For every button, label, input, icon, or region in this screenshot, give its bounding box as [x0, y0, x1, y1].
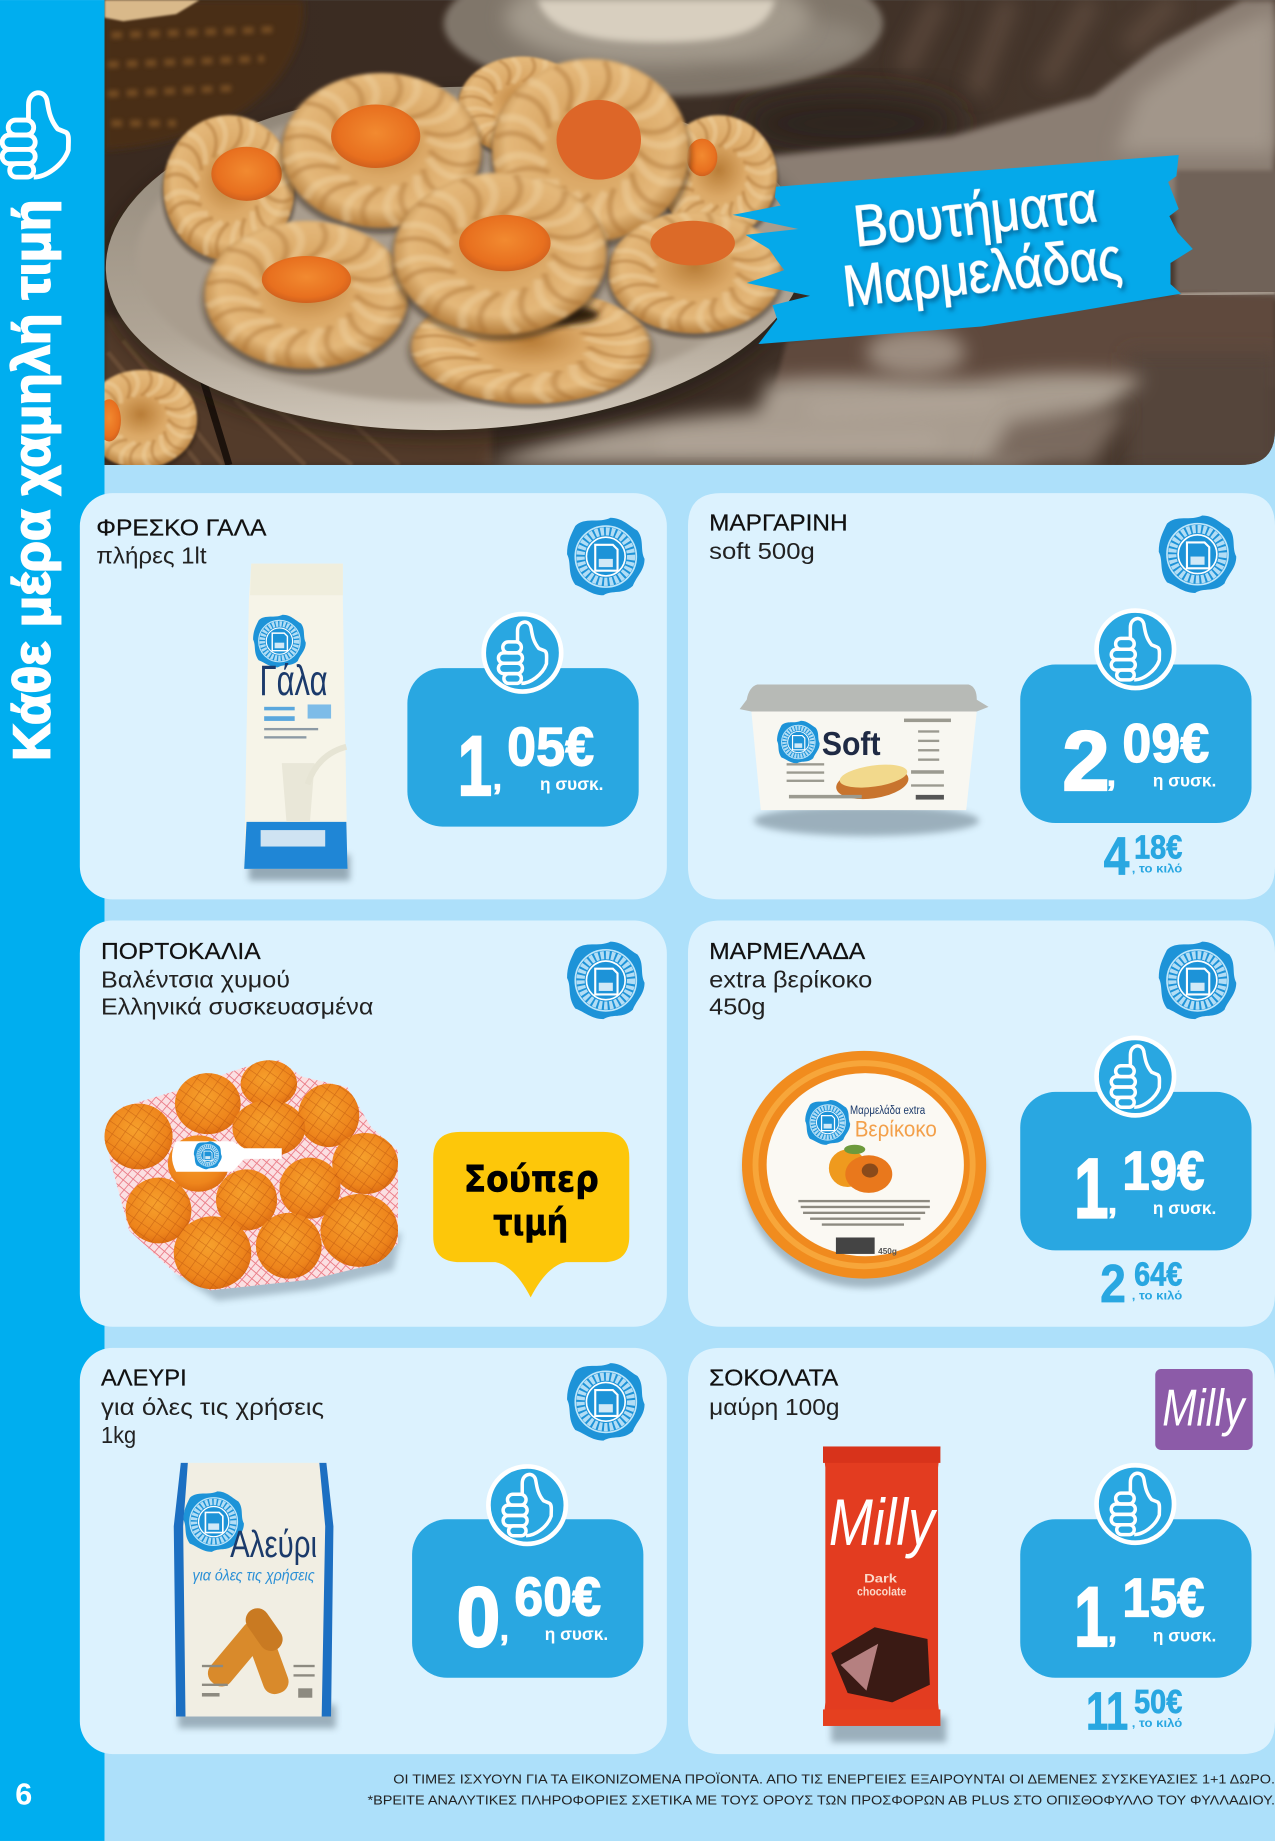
logo word: Milly [1162, 1378, 1247, 1436]
price box [407, 614, 639, 827]
bar flavour 1: Dark [864, 1573, 898, 1586]
panel background [688, 1348, 1275, 1754]
saucer [444, 0, 883, 96]
icon: thumbs badge [1097, 1465, 1174, 1543]
price box [412, 1466, 643, 1678]
callout line 2: τιμή [493, 1201, 568, 1244]
unit: η συσκ. [540, 774, 603, 794]
bowl highlights [108, 29, 276, 123]
jam [211, 147, 282, 201]
brand word: Soft [822, 725, 881, 762]
footer note line 2: *ΒΡΕΙΤΕ ΑΝΑΛΥΤΙΚΕΣ ΠΛΗΡΟΦΟΡΙΕΣ ΣΧΕΤΙΚΑ ΜΕ ΤΟΥΣ ΟΡΟΥΣ ΤΩΝ ΠΡΟΣΦΟΡΩΝ ΑΒ PLUS ΣΤΟ ΟΠΙΣΘΟΦΥΛΛΟ ΤΟΥ ΦΥΛΛΑΔΙΟΥ. [367, 1793, 1275, 1808]
product: milk carton [244, 564, 350, 881]
carton seal [253, 615, 306, 667]
barcode [836, 1237, 875, 1254]
comma: , [1107, 758, 1116, 792]
carton word: Γάλα [259, 657, 328, 704]
label [767, 1073, 964, 1256]
subheading: μαύρη 100g [709, 1394, 839, 1420]
nutrition [261, 830, 325, 847]
wrapper [823, 1446, 940, 1726]
cookie top-left [276, 70, 486, 236]
per kilo: , το κιλό [1132, 1290, 1182, 1303]
jam [687, 139, 717, 176]
bag fine print [202, 1665, 315, 1698]
tub body [751, 712, 977, 810]
panel: chocolate [688, 1348, 1275, 1754]
carton base [244, 822, 348, 869]
box [1020, 665, 1252, 823]
wrapper top [823, 1446, 940, 1463]
price euros: 1 [1074, 1141, 1108, 1236]
comma: , [1108, 1186, 1117, 1220]
pastry [203, 1604, 292, 1697]
shadow [831, 1716, 946, 1742]
panel: milk [80, 493, 667, 899]
cloth light line [1180, 292, 1275, 295]
cookie bottom [393, 280, 668, 413]
panel: oranges [80, 920, 667, 1327]
jam [556, 100, 641, 180]
subheading line 1: extra βερίκοκο [709, 966, 872, 992]
label text [787, 719, 951, 800]
heading: ΠΟΡΤΟΚΑΛΙΑ [101, 938, 261, 964]
wrapper bottom [823, 1709, 940, 1726]
left sidebar [0, 0, 104, 1841]
cloth band light patch [866, 329, 965, 376]
subheading line 2: 450g [709, 993, 765, 1019]
logo plate [1155, 1369, 1253, 1450]
per kilo price [1104, 827, 1182, 887]
shadow [176, 1233, 402, 1301]
wood stripes upper right [904, 0, 1174, 94]
euros: 4 [1104, 827, 1129, 887]
bar chocolate image [831, 1627, 930, 1702]
coffee cup [538, 0, 775, 42]
tag [172, 1141, 282, 1172]
product: marmalade lid [742, 1051, 987, 1288]
brush shape [733, 155, 1193, 344]
per kilo price [1086, 1681, 1182, 1741]
jam [650, 221, 735, 265]
tub seal [777, 721, 820, 763]
cookie center [377, 160, 623, 347]
page number: 6 [15, 1778, 32, 1812]
shadow [249, 855, 350, 881]
cloth lower right dark [1127, 352, 1275, 470]
cents: 64€ [1134, 1256, 1182, 1293]
toast [834, 763, 910, 803]
heading: ΜΑΡΓΑΡΙΝΗ [709, 510, 848, 536]
footer note line 1: ΟΙ ΤΙΜΕΣ ΙΣΧΥΟΥΝ ΓΙΑ ΤΑ ΕΙΚΟΝΙΖΟΜΕΝΑ ΠΡΟΪΟΝΤΑ. ΑΠΟ ΤΙΣ ΕΝΕΡΓΕΙΕΣ ΕΞΑΙΡΟΥΝΤΑΙ ΟΙ ΔΕΜΕΝΕΣ ΣΥΣΚΕΥΑΣΙΕΣ 1+1 ΔΩΡΟ. [393, 1771, 1275, 1786]
table gap [202, 376, 229, 465]
chocolate highlight [841, 1644, 878, 1691]
cloth texture [657, 402, 998, 444]
callout: super price [433, 1132, 629, 1297]
right blue edge [319, 1463, 333, 1716]
sidebar slogan: Κάθε μέρα χαμηλή τιμή [2, 200, 60, 761]
carton body [244, 564, 348, 869]
product: bag of oranges [104, 1060, 402, 1301]
jam [459, 215, 551, 271]
cookie left [160, 113, 298, 266]
peach [829, 1149, 866, 1187]
plate rim [100, 75, 811, 442]
wood grain [106, 341, 399, 465]
bar brand: Milly [829, 1485, 938, 1559]
net over fruit [104, 1060, 398, 1289]
subheading: soft 500g [709, 538, 815, 564]
product: margarine tub [740, 685, 989, 836]
panel background [688, 493, 1275, 899]
box [1020, 1092, 1252, 1250]
lid [740, 685, 989, 712]
panel background [688, 920, 1275, 1327]
panel background [80, 920, 667, 1327]
per kilo price [1100, 1254, 1182, 1314]
cloth lower fold shade [986, 409, 1127, 465]
comma: , [1108, 1614, 1117, 1648]
product: flour bag [174, 1463, 336, 1728]
jam [262, 256, 351, 303]
cents: 50€ [1134, 1683, 1182, 1720]
subheading line 2: 1kg [101, 1422, 136, 1448]
cloth top [751, 0, 1275, 211]
cents: 18€ [1134, 828, 1182, 865]
carton gable [250, 564, 343, 595]
comma: , [500, 1613, 509, 1647]
icon: sidebar thumbs up [2, 93, 69, 177]
lid flavour: Βερίκοκο [855, 1117, 937, 1142]
subheading: πλήρες 1lt [96, 543, 207, 569]
bag seal [183, 1491, 244, 1552]
shadow [743, 1060, 987, 1288]
heading: ΑΛΕΥΡΙ [101, 1364, 187, 1390]
heading: ΦΡΕΣΚΟ ΓΑΛΑ [96, 514, 267, 540]
panel background [80, 493, 667, 899]
butter [838, 761, 909, 791]
net [109, 1060, 398, 1290]
saucer highlight [754, 20, 872, 70]
box [407, 668, 639, 827]
lid seal [805, 1100, 850, 1145]
price cents: 60€ [514, 1566, 601, 1628]
callout line 1: Σούπερ [464, 1158, 599, 1201]
weight: 450g [878, 1247, 897, 1256]
cookie right low [604, 211, 784, 340]
far-left cropped cookie [104, 368, 198, 465]
price euros: 0 [457, 1569, 500, 1664]
tag seal [194, 1141, 222, 1169]
price euros: 1 [458, 718, 492, 813]
shadow [754, 805, 979, 836]
subheading line 2: Ελληνικά συσκευασμένα [101, 993, 373, 1019]
photo: jam cookies on a plate [76, 0, 1275, 476]
banner line 1: Βουτήματα [850, 169, 1100, 260]
price cents: 15€ [1122, 1567, 1205, 1629]
panel: margarine [688, 493, 1275, 899]
icon: seal [1159, 515, 1236, 593]
icon: seal [567, 1363, 645, 1441]
logo: Milly [1155, 1369, 1253, 1450]
subheading line 1: Βαλέντσια χυμού [101, 966, 290, 992]
icon: thumbs badge [1097, 1038, 1174, 1115]
price cents: 19€ [1122, 1139, 1205, 1201]
per kilo: , το κιλό [1132, 862, 1182, 875]
cookie right back [666, 113, 780, 230]
saucer well [505, 0, 810, 65]
product: chocolate bar [823, 1446, 946, 1742]
price euros: 1 [1074, 1569, 1108, 1664]
icon: seal [567, 518, 645, 595]
euros: 2 [1100, 1254, 1126, 1314]
box [412, 1519, 643, 1678]
glass of milk [282, 763, 315, 822]
price euros: 2 [1062, 713, 1109, 808]
jam [331, 105, 420, 168]
bag word: Αλεύρι [230, 1523, 317, 1565]
euros: 11 [1086, 1681, 1128, 1741]
price box [1020, 1465, 1252, 1678]
box [1020, 1519, 1252, 1678]
price box [1020, 1038, 1252, 1250]
price cents: 05€ [507, 716, 594, 778]
banner line 2: Μαρμελάδας [840, 226, 1125, 319]
peach stone [862, 1164, 878, 1178]
icon: thumbs badge [484, 614, 561, 692]
unit: η συσκ. [1153, 1625, 1216, 1645]
icon: seal [567, 942, 645, 1019]
cloth dark panel [1175, 170, 1275, 299]
subheading line 1: για όλες τις χρήσεις [101, 1394, 324, 1420]
wood table [104, 0, 1275, 465]
dark gap [505, 304, 599, 325]
dark shadow under saucer [740, 93, 963, 154]
wood lower left [104, 317, 492, 465]
panel: flour [80, 1348, 667, 1754]
fine print [798, 1200, 930, 1226]
price cents: 09€ [1122, 712, 1209, 774]
icon: seal [1159, 942, 1236, 1019]
cookie top-right [486, 56, 695, 250]
per kilo: , το κιλό [1132, 1717, 1182, 1730]
cloth light fold [1115, 12, 1275, 153]
peach half [845, 1155, 892, 1193]
panel: marmalade [688, 920, 1275, 1327]
oranges [104, 1060, 398, 1289]
jam [104, 399, 121, 442]
bowl contents [104, 0, 200, 21]
cloth lower fold [487, 373, 1145, 465]
leaf [844, 1145, 865, 1154]
comma: , [493, 762, 502, 796]
rim [742, 1051, 986, 1279]
milk splash [308, 747, 346, 784]
unit: η συσκ. [545, 1624, 608, 1644]
unit: η συσκ. [1153, 771, 1216, 791]
icon: thumbs badge [1097, 611, 1174, 688]
bar flavour 2: chocolate [857, 1586, 907, 1599]
bag body [174, 1463, 333, 1716]
cookie bottom-left [189, 210, 424, 380]
rim inner [758, 1066, 970, 1263]
wicker bowl [104, 0, 304, 150]
plate shadow [104, 176, 804, 444]
shadow [178, 1705, 336, 1728]
bubble [433, 1132, 629, 1297]
rim ring [753, 1060, 976, 1269]
left blue edge [174, 1463, 188, 1716]
carton info [264, 704, 331, 739]
lid title: Μαρμελάδα extra [850, 1104, 926, 1117]
heading: ΜΑΡΜΕΛΑΔΑ [709, 938, 866, 964]
bag tagline: για όλες τις χρήσεις [193, 1567, 315, 1584]
cookie back [456, 55, 559, 154]
panel background [80, 1348, 667, 1754]
cloth band [775, 294, 1275, 387]
banner: brush stroke [733, 155, 1193, 344]
plate inner [149, 95, 710, 404]
price box [1020, 611, 1252, 823]
icon: thumbs badge [488, 1466, 566, 1544]
heading: ΣΟΚΟΛΑΤΑ [709, 1364, 839, 1390]
unit: η συσκ. [1153, 1198, 1216, 1218]
